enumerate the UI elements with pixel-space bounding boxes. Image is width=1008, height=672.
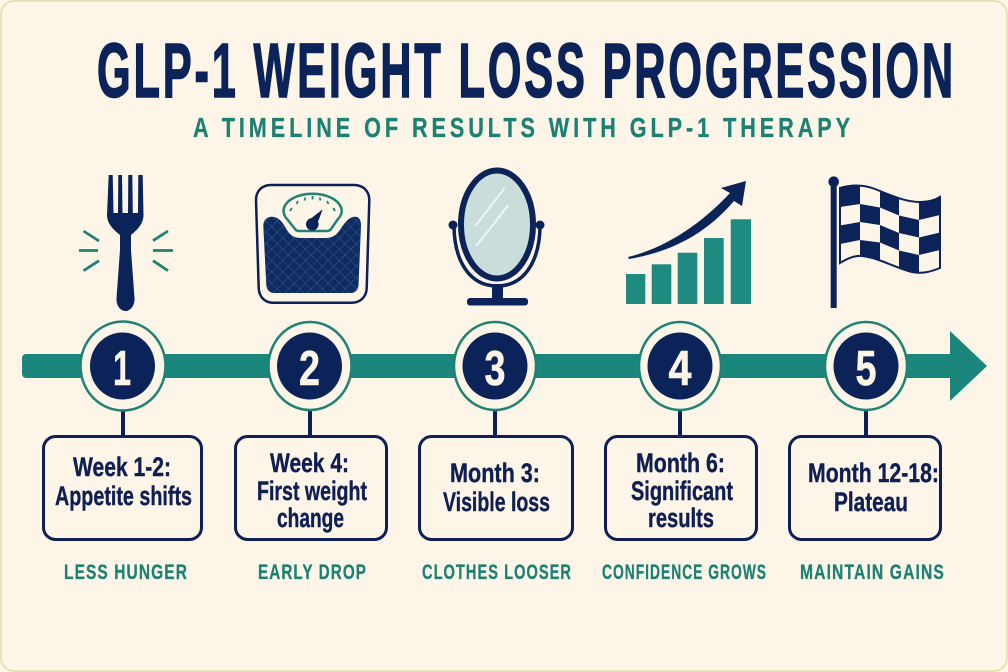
box 4: Significant [631,476,733,506]
label 3: CLOTHES LOOSER [422,561,572,584]
box 2 [236,436,386,540]
box 2: change [277,503,344,533]
step 4: significant results [602,181,767,584]
connector 5 [864,408,868,437]
box 1: Week 1-2: [73,452,171,482]
icon: checkered flag [828,176,940,308]
box 5: Plateau [834,487,908,517]
marker 3 [454,322,536,410]
step 5: plateau [790,176,945,584]
timeline arrow [22,331,987,401]
box 4: Month 6: [636,448,725,478]
connector 2 [308,408,312,437]
icon: scale [256,185,369,303]
step 3: visible loss [420,170,572,584]
marker 5 [825,322,907,410]
marker 3: 3 [484,342,506,396]
box 2: First weight [257,476,367,506]
box 5: Month 12-18: [808,458,939,488]
box 3: Visible loss [443,487,550,517]
icon: rising bar chart [626,181,751,304]
label 2: EARLY DROP [258,561,367,584]
step 2: first weight change [236,185,386,584]
box 1 [44,436,202,540]
icon: fork [79,175,173,311]
box 3 [420,436,572,540]
connector 1 [121,408,125,437]
connector 3 [493,408,497,437]
marker 1: 1 [113,342,131,396]
label 5: MAINTAIN GAINS [800,561,945,584]
label 4: CONFIDENCE GROWS [602,561,767,584]
icon: mirror [448,170,544,306]
box 2: Week 4: [270,448,349,478]
marker 2 [268,322,352,410]
marker 1 [80,322,166,410]
box 3: Month 3: [450,458,540,488]
marker 4: 4 [668,342,692,396]
connector 4 [678,408,682,437]
box 5 [790,436,940,540]
marker 5: 5 [856,342,876,396]
box 1: Appetite shifts [55,481,192,511]
box 4 [606,436,756,540]
marker 4 [639,322,721,410]
subtitle: A TIMELINE OF RESULTS WITH GLP-1 THERAPY [193,112,854,143]
marker 2: 2 [299,342,320,396]
step 1: appetite shifts [44,175,202,584]
box 4: results [648,503,714,533]
label 1: LESS HUNGER [64,561,188,584]
